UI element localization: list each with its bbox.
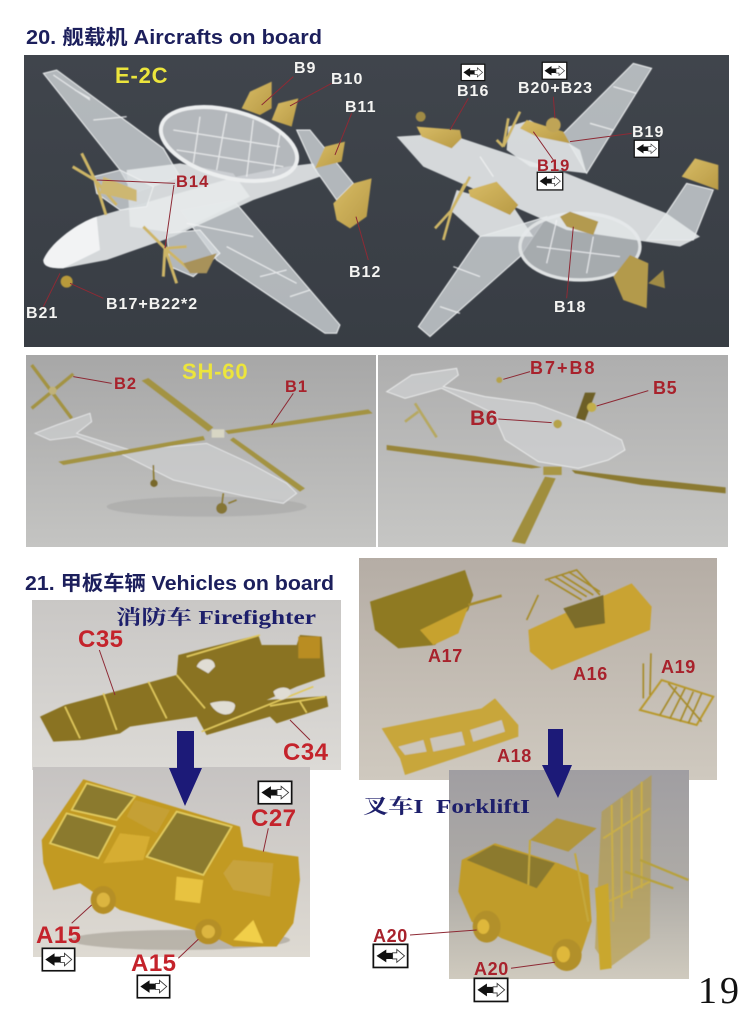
- panel: firefighter parts photograph: [32, 600, 341, 770]
- panel: SH-60 left photograph: B2: [114, 375, 137, 393]
- icon: double arrow: [258, 781, 292, 804]
- panel: E-2C photographs: [24, 55, 729, 347]
- panel: E-2C photographs: B14: [176, 173, 209, 191]
- panel: E-2C photographs: B10: [331, 71, 363, 88]
- leader lines: SH-60 right: [498, 372, 648, 423]
- panel: SH-60 right photograph: [378, 355, 728, 547]
- leader lines: E-2C underside view: [450, 97, 632, 298]
- panel: E-2C photographs: B16: [457, 83, 489, 100]
- panel: forklift assembled photograph: [373, 770, 689, 1001]
- panel: firefighter parts photograph: C34: [283, 739, 329, 766]
- icon: double arrow: [474, 978, 508, 1001]
- panel: E-2C photographs: B9: [294, 60, 316, 77]
- panel: forklift parts photograph: A17: [428, 646, 463, 666]
- arrow: firefighter parts to assembly: [169, 731, 202, 806]
- panel: E-2C photographs: B12: [349, 264, 381, 281]
- E-2C top view: [43, 70, 372, 333]
- panel: E-2C photographs: B21: [26, 305, 58, 322]
- icon: double arrow: [373, 944, 408, 967]
- panel: E-2C photographs: B18: [554, 299, 586, 316]
- arrow: forklift parts to assembly: [542, 729, 572, 798]
- panel: firefighter parts photograph: 消防车 Firefighter: [116, 606, 316, 629]
- panel: forklift assembled photograph: A20: [474, 959, 509, 979]
- E-2C underside view: [397, 63, 718, 337]
- panel: E-2C photographs: B11: [345, 99, 376, 116]
- icon: double arrow: [461, 64, 485, 81]
- forklift caption: 叉车I ForkliftI: [363, 795, 530, 818]
- panel: SH-60 right photograph: B5: [653, 378, 677, 398]
- panel: SH-60 left photograph: B1: [285, 378, 308, 396]
- leader lines: E-2C top view: [43, 77, 368, 307]
- heading: section 21: 21. 甲板车辆 Vehicles on board: [25, 571, 334, 595]
- panel: SH-60 left photograph: [26, 355, 376, 547]
- leader lines: firefighter assembled: [72, 828, 268, 958]
- panel: SH-60 left photograph: SH-60: [182, 359, 248, 384]
- icon: double arrow: [42, 948, 75, 971]
- panel: SH-60 right photograph: B7+B8: [530, 358, 597, 378]
- panel: firefighter assembled photograph: C27: [251, 805, 297, 832]
- panel: firefighter assembled photograph: [33, 767, 310, 998]
- panel: forklift parts photograph: A18: [497, 746, 532, 766]
- panel: E-2C photographs: B17+B22*2: [106, 296, 198, 313]
- labels: E-2C: [115, 63, 168, 88]
- heading: section 20: 20. 舰载机 Aircrafts on board: [26, 26, 322, 49]
- panel: E-2C photographs: B20+B23: [518, 80, 593, 97]
- panel: firefighter assembled photograph: A15: [131, 950, 177, 977]
- panel: forklift parts photograph: A19: [661, 657, 696, 677]
- page number: 19: [698, 970, 742, 1012]
- icon: double arrow: [634, 140, 659, 157]
- panel: forklift parts photograph: A16: [573, 664, 608, 684]
- panel: E-2C photographs: B19: [632, 124, 664, 141]
- leader lines: SH-60 left: [73, 377, 293, 425]
- icon: double arrow: [542, 62, 567, 79]
- panel: forklift parts photograph: [359, 558, 717, 780]
- leader lines: forklift assembled: [410, 930, 555, 968]
- icon: double arrow: [537, 172, 563, 190]
- icon: double arrow: [137, 975, 170, 998]
- panel: firefighter assembled photograph: A15: [36, 922, 82, 949]
- leader lines: firefighter parts: [99, 650, 310, 740]
- panel: E-2C photographs: B19: [537, 157, 570, 175]
- panel: forklift assembled photograph: A20: [373, 926, 408, 946]
- panel: firefighter parts photograph: C35: [78, 626, 124, 653]
- panel: SH-60 right photograph: B6: [470, 407, 498, 430]
